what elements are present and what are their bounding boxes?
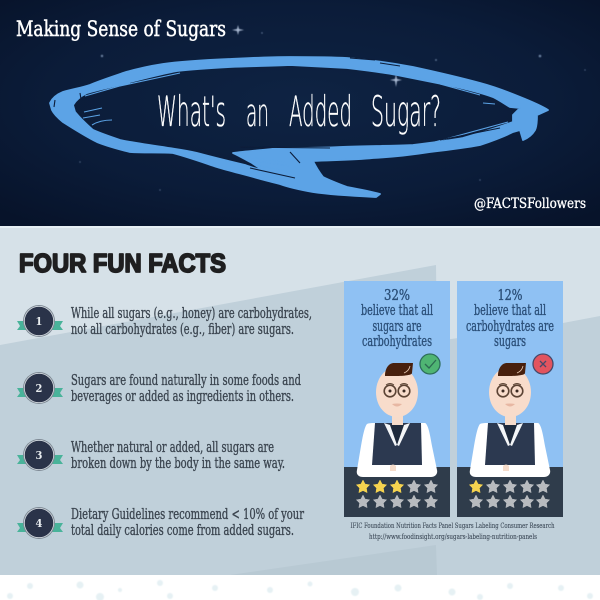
heading: Making Sense of Sugars: Making Sense of Sugars: [16, 17, 226, 41]
fact 1 text: not all carbohydrates (e.g., fiber) are sugars.: [71, 320, 294, 338]
text: Sugar?: [371, 87, 441, 136]
badge 2: [17, 372, 63, 404]
badge 1: 1: [36, 315, 42, 328]
fact 2 text: [71, 371, 301, 405]
fact 3 text: broken down by the body in the same way.: [71, 454, 285, 472]
fact 1 text: While all sugars (e.g., honey) are carbohydrates,: [71, 304, 312, 322]
badge 3: 3: [36, 449, 43, 462]
badge 1: [17, 305, 63, 337]
card 1 statistic text: 32%: [384, 286, 410, 304]
icon: sparkle star: [232, 25, 402, 87]
speech bubble brush outline: [50, 57, 548, 197]
rating: 1 of 10 stars: [469, 480, 550, 508]
panel: 32% card: [344, 281, 450, 517]
heading: What's an Added Sugar?: What's: [157, 87, 226, 136]
source citation: http://www.foodinsight.org/sugars-labeling-nutrition-panels: [369, 532, 537, 541]
badge 4: 4: [36, 517, 43, 530]
card 2 statistic text: believe that all: [474, 301, 546, 319]
panel: bottom white strip with faint stars: [0, 575, 600, 600]
fact 4 text: Dietary Guidelines recommend < 10% of your: [71, 505, 304, 523]
fact 3 text: [71, 438, 285, 472]
badge 3: [17, 439, 63, 471]
panel: header: [0, 0, 600, 226]
fact 3: [17, 438, 285, 472]
badge 2: 2: [36, 382, 42, 395]
fact 1: [17, 304, 312, 338]
card 2 statistic text: [466, 286, 554, 350]
fact 1 text: [71, 304, 312, 338]
illustration: person 2: [470, 363, 550, 477]
fact 2: [17, 371, 301, 405]
panel: 12% card: [457, 281, 563, 517]
card 2 statistic text: carbohydrates are: [466, 317, 554, 335]
card 1 statistic text: sugars are: [372, 317, 422, 335]
heading: What's an Added Sugar?: Added: [289, 87, 352, 136]
panel: four fun facts background: [0, 226, 600, 576]
card 1 statistic text: believe that all: [361, 301, 433, 319]
fact 4 text: total daily calories come from added sugars.: [71, 521, 294, 539]
fact 4: [17, 505, 304, 539]
heading: What's an Added Sugar?: [157, 87, 441, 136]
fact 4 text: [71, 505, 304, 539]
fact 2 text: beverages or added as ingredients in others.: [71, 387, 294, 405]
fact 3 text: Whether natural or added, all sugars are: [71, 438, 274, 456]
heading: What's an Added Sugar?: an: [246, 91, 269, 135]
rating: 3 of 10 stars: [356, 480, 438, 508]
card 1 statistic text: carbohydrates: [362, 332, 432, 350]
card 1 statistic text: [361, 286, 433, 350]
fact 2 text: Sugars are found naturally in some foods and: [71, 371, 301, 389]
source citation: [350, 521, 555, 541]
heading: Four Fun Facts: FOUR FUN FACTS: [19, 248, 226, 278]
icon: green check: [420, 354, 440, 374]
card 2 statistic text: 12%: [498, 286, 523, 304]
badge 4: [17, 507, 63, 539]
illustration: person 1: [357, 363, 437, 477]
card 2 statistic text: sugars: [494, 332, 526, 350]
icon: red cross: [533, 354, 553, 374]
text: @FACTSFollowers handle: @FACTSFollowers: [474, 196, 586, 212]
